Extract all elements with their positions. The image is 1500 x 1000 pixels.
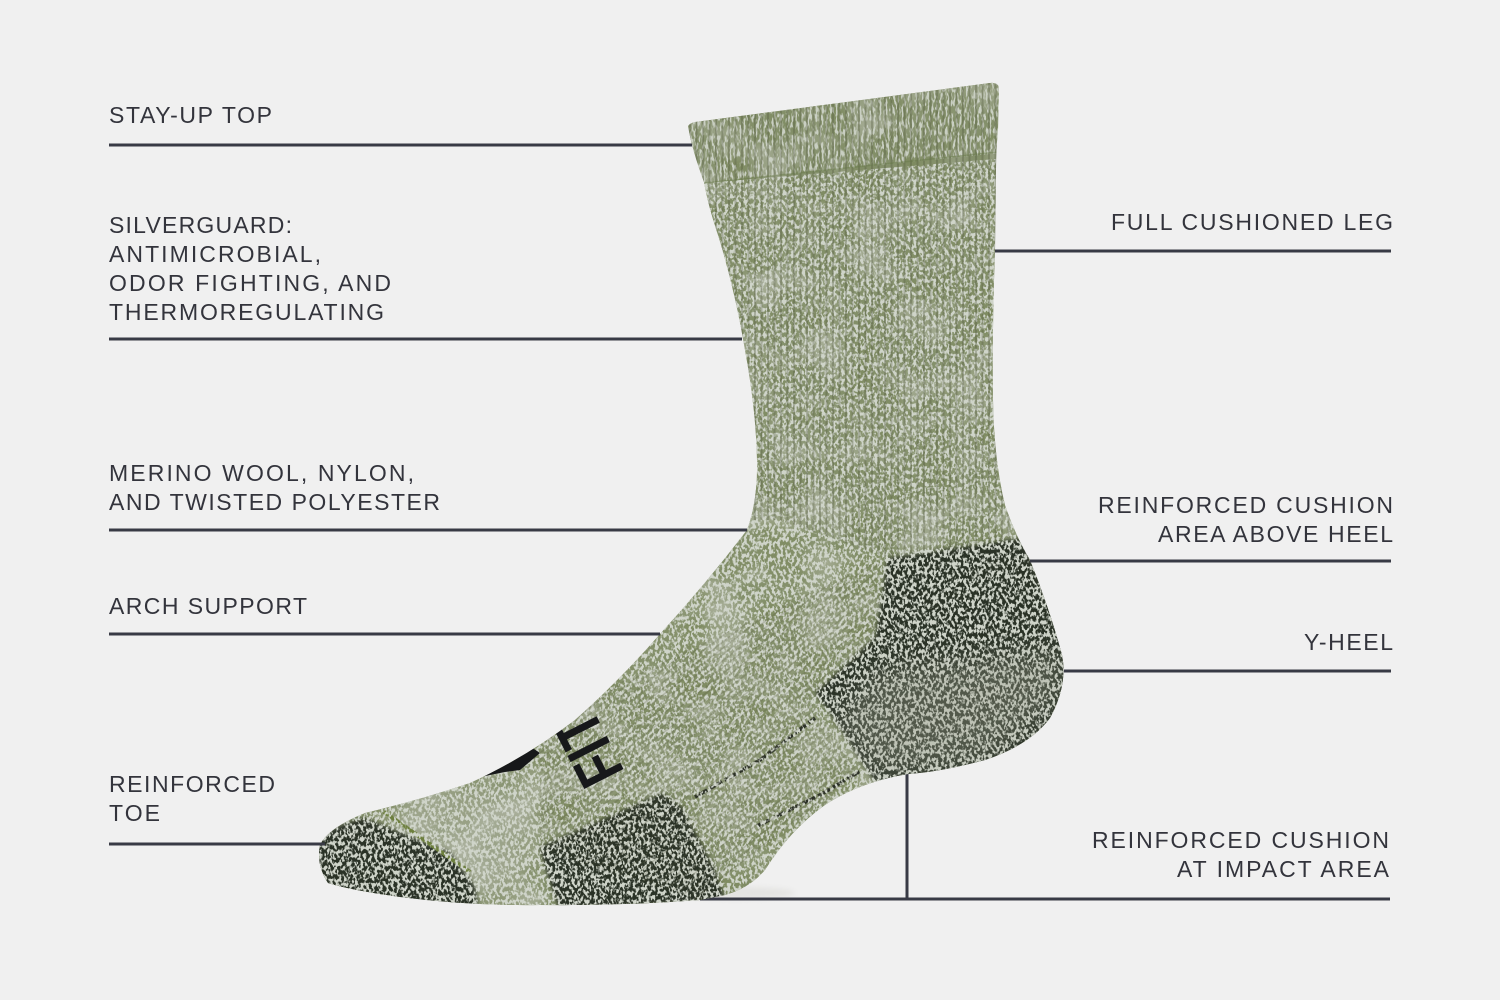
label: AND TWISTED POLYESTER [109,489,440,515]
label: ANTIMICROBIAL, [109,241,321,267]
label: MERINO WOOL, NYLON, [109,460,414,486]
cuff seam [704,152,998,183]
label [1098,492,1393,547]
forefoot reinforced patch [540,793,725,910]
label [109,212,391,325]
label: STAY-UP TOP [109,102,272,128]
pale mottling [332,83,1017,905]
callout label: cushion at impact area: REINFORCED CUSHION [1092,827,1389,853]
body knit flecks [300,140,1080,920]
label: ODOR FIGHTING, AND [109,270,391,296]
leader line [995,250,1391,252]
callout: reinforced toe [109,771,325,844]
label: AREA ABOVE HEEL [1158,521,1393,547]
callout: merino wool [109,460,747,530]
toe reinforced patch [312,818,478,910]
label: TOE [109,800,160,826]
callout label: cushion at impact area: AT IMPACT AREA [1177,856,1390,882]
label: REINFORCED CUSHION [1098,492,1393,518]
callout: cushion above heel [1030,492,1393,561]
callout line: impact area [700,772,1390,899]
label [109,771,275,826]
leader line [109,144,692,146]
callout: silverguard [109,212,742,339]
leader line [1030,560,1391,562]
toe stripe [384,812,470,872]
foot ribs [540,560,880,900]
label: THERMOREGULATING [109,299,384,325]
leader line [109,632,660,636]
pale toe area [370,785,540,900]
leader line [109,528,747,532]
callout label: cushion at impact area [1092,827,1390,882]
leader line [109,338,742,340]
label: SILVERGUARD: [109,212,292,238]
sock illustration [300,70,1080,920]
label [109,460,440,515]
sole seam lines [694,716,860,827]
logo mark [484,748,540,776]
label: Y-HEEL [1304,629,1393,655]
sock base knit [300,70,1080,920]
heel reinforced patch [815,538,1070,782]
lower heel pale tint [835,650,1060,775]
leader line [1064,670,1391,672]
leader line [109,842,325,846]
leg ribs [680,70,1010,557]
label: ARCH SUPPORT [109,593,307,619]
green mottling [300,70,1080,920]
sock shadow [675,887,795,899]
cuff knit flecks [689,83,999,183]
label: FULL CUSHIONED LEG [1111,209,1393,235]
logo text: FIT [540,700,637,798]
label: REINFORCED [109,771,275,797]
